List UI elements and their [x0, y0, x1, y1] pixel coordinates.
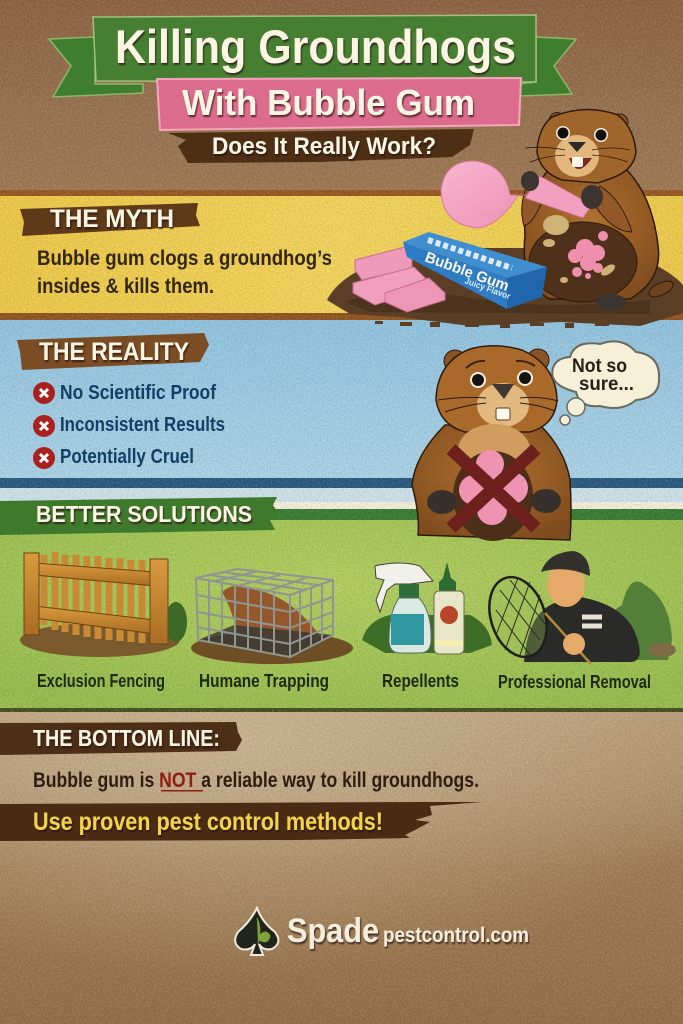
label: Professional Removal	[498, 672, 651, 692]
text: myth description: insides & kills them.	[37, 275, 214, 298]
dark tag	[0, 722, 242, 755]
right arm	[594, 186, 632, 232]
thought bubble	[552, 341, 659, 425]
illustration: bubble gum box	[403, 232, 547, 309]
spray head	[375, 563, 433, 612]
cage floor	[198, 625, 333, 657]
panel: bottom tan area	[0, 712, 683, 1024]
wood tag	[17, 333, 209, 370]
whiskers	[438, 397, 558, 412]
body	[412, 425, 571, 540]
paws	[521, 171, 603, 209]
band border top	[0, 190, 683, 196]
teeth	[496, 408, 510, 420]
soil	[191, 632, 353, 664]
net hoop	[480, 570, 556, 664]
blue stripe	[0, 478, 683, 488]
ribbon right tail	[520, 37, 576, 96]
belly gum clump	[568, 231, 608, 279]
body	[524, 597, 640, 662]
text: myth description	[37, 247, 332, 298]
net mesh	[496, 578, 546, 655]
label: Humane Trapping	[199, 671, 329, 691]
sentence: Bubble gum is NOT a reliable way to kill groundhogs.	[33, 769, 479, 792]
dirt	[648, 643, 676, 657]
left arm	[522, 184, 544, 226]
box stripes	[428, 240, 512, 268]
ears	[444, 349, 549, 372]
label: better solutions	[0, 497, 279, 535]
tail	[647, 278, 675, 300]
label: Exclusion Fencing	[37, 671, 165, 691]
logo	[235, 908, 529, 955]
bushes	[362, 615, 492, 653]
nose	[492, 384, 514, 399]
second bottle cap	[439, 562, 456, 591]
bubble	[567, 398, 585, 416]
green stripe	[270, 509, 683, 520]
heading: main title: Killing Groundhogs	[115, 20, 516, 73]
handle	[545, 613, 591, 664]
paws	[427, 489, 561, 514]
ribbon left tail	[49, 37, 143, 97]
piece back	[355, 247, 412, 280]
heading: question: Does It Really Work?	[212, 133, 436, 160]
bubble text line 2: sure...	[579, 374, 634, 395]
box top	[403, 232, 547, 278]
chest badges	[582, 617, 602, 626]
dirt crumbs over sky edge	[375, 321, 636, 328]
green banner	[93, 15, 536, 82]
spray bottle	[389, 598, 431, 653]
panel: reality blue band	[0, 320, 683, 510]
illustration: groundhog with gum	[441, 109, 675, 310]
red x	[451, 449, 536, 528]
cap	[541, 551, 590, 576]
brows	[466, 361, 535, 368]
bubble text: Not so	[572, 356, 627, 377]
spray label	[391, 614, 424, 645]
wordmark: Spade	[287, 912, 379, 950]
foot	[596, 294, 626, 310]
pink gum	[459, 450, 528, 525]
spade icon	[235, 908, 278, 955]
left post	[24, 553, 39, 635]
green tag	[0, 497, 279, 535]
brush stroke behind question	[168, 129, 474, 163]
cloud	[552, 341, 659, 408]
body	[524, 168, 659, 299]
soil	[20, 623, 180, 657]
groundhog in cage	[222, 585, 322, 642]
box flavor label: Juicy Flavor	[463, 275, 512, 301]
muzzle	[555, 135, 599, 177]
ears	[550, 112, 628, 130]
item: inconsistent results: Inconsistent Results	[60, 414, 225, 436]
solution: humane trapping	[191, 569, 353, 691]
pale stripe	[0, 488, 683, 510]
white stripe	[270, 502, 683, 509]
dirt mound under myth groundhog	[327, 248, 683, 326]
shrub	[601, 581, 672, 660]
teeth	[572, 157, 583, 167]
domain: pestcontrol.com	[383, 924, 529, 947]
texture: bottom light patch	[0, 712, 683, 1024]
solution: exclusion fencing	[20, 552, 187, 691]
head	[537, 109, 636, 183]
label: the bottom line	[0, 722, 242, 755]
text: myth description: Bubble gum clogs a groundhog’s	[37, 247, 332, 270]
band border bottom	[0, 313, 683, 320]
head	[436, 346, 557, 432]
hand	[563, 633, 585, 655]
sprout	[257, 918, 270, 944]
call to action	[0, 802, 483, 841]
panel: solutions grass	[0, 519, 683, 709]
pickets	[44, 552, 142, 643]
bubble small	[560, 415, 570, 425]
top rail	[34, 563, 155, 586]
piece left	[353, 267, 427, 305]
label: the reality	[17, 333, 209, 370]
solution: professional removal	[480, 551, 676, 692]
heading: subtitle: With Bubble Gum	[182, 82, 475, 123]
panel border	[0, 708, 683, 712]
heading: THE REALITY	[39, 338, 189, 366]
text: Use proven pest control methods!	[33, 808, 383, 836]
bush	[165, 602, 187, 642]
item: potentially cruel: Potentially Cruel	[60, 446, 194, 468]
nose	[568, 142, 586, 152]
wood tag	[20, 203, 200, 236]
item: potentially cruel	[33, 446, 194, 469]
label: Repellents	[382, 671, 459, 691]
box brand label: Bubble Gum	[423, 249, 511, 295]
underline	[161, 790, 203, 792]
whiskers	[525, 147, 630, 162]
pink banner	[157, 78, 521, 130]
item: no scientific proof: No Scientific Proof	[60, 382, 216, 404]
solution: repellents	[362, 562, 492, 691]
right post	[150, 559, 168, 644]
second bottle band	[435, 640, 463, 646]
second bottle icon	[440, 606, 458, 624]
heading: THE BOTTOM LINE:	[33, 725, 220, 751]
chest	[458, 424, 530, 476]
title banner	[49, 15, 576, 163]
eyes	[470, 370, 533, 388]
spray neck	[399, 584, 419, 598]
piece front	[385, 278, 445, 312]
belly	[529, 222, 637, 302]
box front	[403, 242, 507, 309]
second bottle	[434, 591, 464, 654]
gum stick	[525, 176, 592, 218]
illustration: doubtful groundhog	[412, 346, 571, 541]
list: reality points	[33, 382, 225, 469]
panel: myth yellow band	[0, 193, 683, 320]
muzzle	[477, 383, 529, 427]
label: the myth	[20, 203, 200, 236]
box side	[507, 267, 547, 309]
bottom rail	[34, 606, 155, 634]
mouth	[569, 158, 592, 169]
eyes	[556, 126, 608, 142]
belly food bits	[543, 215, 617, 283]
gum bubble	[441, 161, 536, 228]
belly	[453, 451, 533, 541]
brush stroke	[0, 802, 483, 841]
heading: BETTER SOLUTIONS	[36, 501, 252, 527]
face	[547, 563, 585, 607]
dirt speckle	[345, 292, 650, 314]
cage bars	[196, 569, 333, 657]
background: top brown panel	[0, 0, 683, 193]
illustration: gum pieces	[353, 247, 445, 312]
heading: THE MYTH	[50, 205, 174, 233]
